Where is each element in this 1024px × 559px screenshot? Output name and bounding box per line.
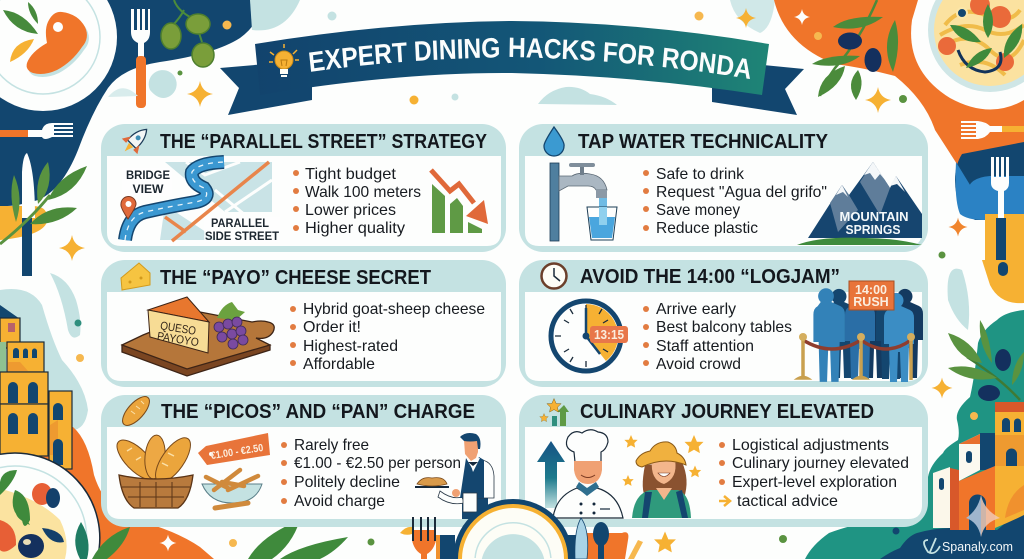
decoration: top olives and sparkles	[59, 0, 775, 261]
bullet list	[643, 301, 792, 373]
icon: falling price chart	[431, 170, 488, 233]
panel: avoid the logjam	[519, 260, 928, 387]
bullet list: Higher quality	[305, 220, 405, 237]
icon: traveller with sun hat	[622, 435, 704, 518]
bullet list	[719, 437, 909, 510]
bullet list: Request "Agua del grifo"	[656, 184, 827, 201]
bullet list: Reduce plastic	[656, 220, 758, 237]
bullet list: Lower prices	[305, 202, 396, 219]
cheese board illustration: PAYOYO	[156, 331, 200, 349]
bullet list: Rarely free	[294, 437, 369, 454]
heading: THE “PICOS” AND “PAN” CHARGE	[161, 401, 475, 423]
icon: rocket	[117, 122, 154, 159]
heading: THE “PARALLEL STREET” STRATEGY	[160, 131, 488, 153]
map illustration: PARALLEL	[211, 216, 269, 230]
icon: small clock	[542, 264, 566, 288]
bullet list: tactical advice	[737, 493, 838, 510]
icon: waiter	[415, 433, 494, 519]
bullet list: Staff attention	[656, 338, 754, 355]
bullet list	[290, 301, 485, 373]
bullet list: Avoid charge	[294, 493, 385, 510]
icon: mountain springs: MOUNTAIN	[840, 210, 908, 224]
ribbon tail: right	[712, 60, 804, 115]
map illustration	[121, 162, 280, 243]
icon: stars and growth	[540, 398, 569, 426]
map illustration: SIDE STREET	[205, 229, 280, 243]
bullet list: Walk 100 meters	[305, 184, 421, 201]
panel: payo cheese secret	[101, 260, 506, 387]
icon: mountain springs: SPRINGS	[846, 223, 900, 237]
icon: water drop	[544, 127, 564, 156]
icon: chef	[553, 430, 623, 518]
bullet list: Arrive early	[656, 301, 736, 318]
arrow: elevation	[537, 441, 565, 508]
decoration: right town buildings	[932, 320, 1024, 537]
bullet list: Highest-rated	[303, 338, 398, 355]
map illustration: VIEW	[132, 182, 164, 196]
icon: mountain springs	[797, 162, 922, 245]
ribbon body	[255, 21, 769, 95]
bullet list	[293, 166, 421, 237]
bullet list: Affordable	[303, 356, 375, 373]
panel: tap water technicality	[519, 124, 928, 252]
bread basket, price tag and bowl: €1.00 - €2.50	[210, 442, 264, 462]
watermark: Spanaly.com: Spanaly.com	[942, 540, 1013, 554]
bullet list: Culinary journey elevated	[732, 455, 909, 472]
bread basket, price tag and bowl	[111, 432, 270, 508]
decoration: bottom-left orange blob	[0, 427, 214, 559]
decoration: bottom leaves and dots	[160, 520, 900, 559]
icon: large clock: 13:15	[594, 327, 624, 342]
cheese board illustration: QUESO	[159, 320, 197, 338]
cheese board illustration	[122, 297, 274, 376]
bullet list	[281, 437, 461, 510]
heading: TAP WATER TECHNICALITY	[578, 131, 829, 153]
decoration: bottom centre plate and cutlery	[400, 499, 643, 559]
bullet list: Best balcony tables	[656, 319, 792, 336]
bullet list: Politely decline	[294, 474, 400, 491]
decoration: right teal blob	[805, 260, 1024, 559]
bullet list: Order it!	[303, 319, 361, 336]
bullet list: Expert-level exploration	[732, 474, 897, 491]
bullet list: Save money	[656, 202, 740, 219]
crowd behind stanchions: 14:00	[855, 283, 887, 297]
icon: cheese	[121, 263, 150, 290]
panel: parallel street strategy	[101, 122, 506, 252]
heading: THE “PAYO” CHEESE SECRET	[160, 267, 431, 289]
bullet list: Logistical adjustments	[732, 437, 889, 454]
icon: small baguette	[118, 392, 154, 430]
bullet list: €1.00 - €2.50 per person	[294, 455, 461, 472]
bullet list	[643, 166, 827, 237]
bullet list: Tight budget	[305, 166, 397, 183]
panel: picos and pan charge	[101, 392, 506, 527]
heading: CULINARY JOURNEY ELEVATED	[580, 401, 874, 423]
crowd behind stanchions	[796, 281, 923, 382]
bullet list: Hybrid goat-sheep cheese	[303, 301, 485, 318]
ribbon tail: left	[220, 60, 312, 115]
decoration: bottom-left plate with olives	[0, 453, 130, 559]
heading: AVOID THE 14:00 “LOGJAM”	[580, 266, 840, 288]
decoration: top-right orange corner with pasta plate	[774, 0, 1024, 278]
map illustration: BRIDGE	[126, 168, 170, 182]
crowd behind stanchions: RUSH	[853, 295, 889, 309]
title banner ribbon	[220, 21, 804, 115]
bullet list: Safe to drink	[656, 166, 745, 183]
icon: large clock	[551, 301, 628, 371]
decoration: left town buildings	[0, 300, 72, 469]
icon: tap and glass	[550, 163, 617, 241]
panel: culinary journey elevated	[519, 395, 928, 527]
bullet list: Avoid crowd	[656, 356, 741, 373]
decoration: top-left navy corner with plate and cutlery	[0, 0, 260, 276]
icon: light bulb	[269, 44, 299, 77]
title text: EXPERT DINING HACKS FOR RONDA	[309, 38, 750, 79]
watermark: Spanaly.com	[924, 538, 1013, 554]
decoration: left light-teal shapes	[0, 273, 88, 430]
